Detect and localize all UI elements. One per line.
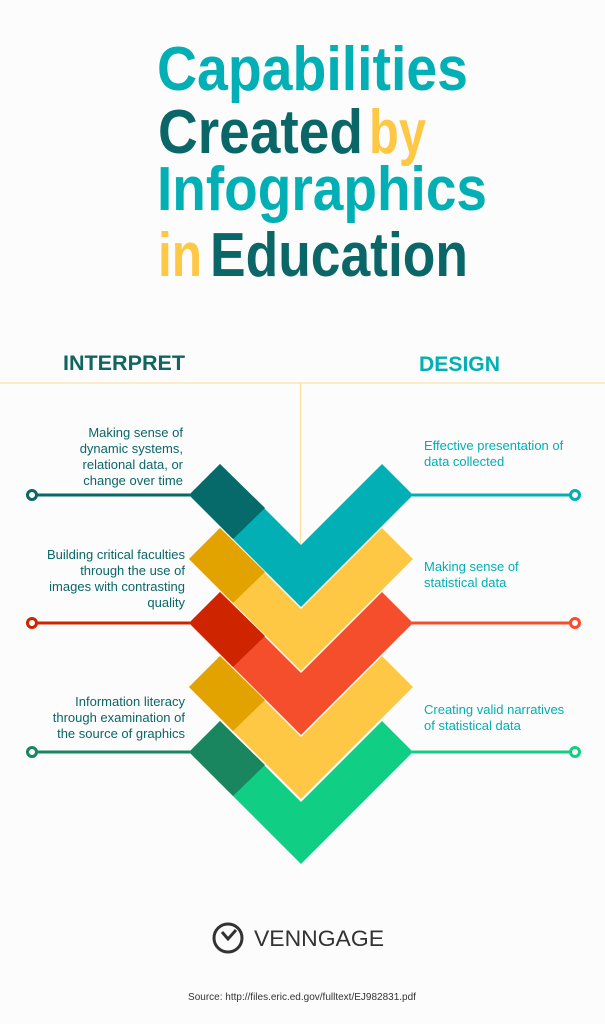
chevron stack	[189, 464, 413, 864]
left texts: through the use of	[80, 563, 185, 578]
title: by	[369, 98, 426, 167]
title: Education	[210, 221, 468, 290]
connector lines	[28, 490, 580, 756]
right texts: of statistical data	[424, 718, 522, 733]
title	[157, 35, 487, 290]
left texts: Building critical faculties	[47, 547, 185, 562]
left texts	[47, 425, 186, 741]
title: Created	[158, 98, 363, 167]
right texts: statistical data	[424, 575, 507, 590]
title: in	[158, 221, 202, 290]
title: Capabilities	[157, 35, 468, 104]
right texts: Effective presentation of	[424, 438, 564, 453]
source: Source: http://files.eric.ed.gov/fulltext/EJ982831.pdf	[188, 992, 416, 1003]
heading: design: DESIGN	[419, 353, 500, 376]
left texts: change over time	[83, 473, 183, 488]
right texts: Making sense of	[424, 559, 519, 574]
left texts: the source of graphics	[57, 726, 185, 741]
title: Infographics	[157, 155, 487, 224]
left texts: relational data, or	[83, 457, 184, 472]
left texts: dynamic systems,	[80, 441, 183, 456]
right texts: data collected	[424, 454, 504, 469]
right texts	[424, 438, 565, 733]
right texts: Creating valid narratives	[424, 702, 565, 717]
left texts: Making sense of	[88, 425, 183, 440]
logo	[214, 924, 384, 952]
left texts: through examination of	[53, 710, 185, 725]
heading: interpret: INTERPRET	[63, 352, 185, 375]
left texts: images with contrasting	[49, 579, 185, 594]
left texts: Information literacy	[75, 694, 185, 709]
left texts: quality	[147, 595, 186, 610]
logo: VENNGAGE	[254, 926, 384, 951]
